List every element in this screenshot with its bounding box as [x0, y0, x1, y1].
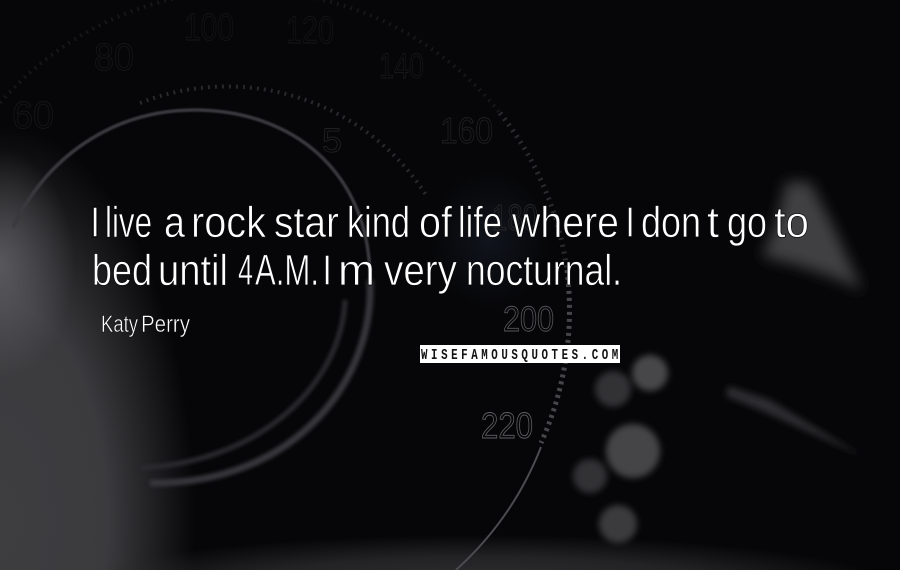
line 2: bed — [92, 246, 152, 295]
line 1: I — [624, 198, 636, 247]
outer tick arc, top — [0, 0, 500, 113]
speed labels: 200 — [503, 300, 554, 339]
line 2 — [92, 246, 622, 295]
speed labels: 100 — [184, 7, 234, 49]
author — [101, 311, 190, 338]
author: Katy — [101, 311, 138, 338]
inner gauge ring, bottom — [150, 280, 370, 483]
inner gauge ring, second band — [140, 300, 345, 468]
line 2: 4 — [238, 246, 253, 295]
left haze — [0, 120, 195, 570]
speed labels: 180 — [492, 197, 538, 238]
line 1: I — [89, 198, 101, 247]
watermark badge: WISEFAMOUSQUOTES.COM — [421, 346, 618, 364]
inner gauge ring, top — [13, 110, 370, 280]
line 1: t — [707, 198, 719, 247]
line 1: to — [774, 198, 809, 247]
line 1: star — [274, 198, 339, 247]
middle tick arc — [140, 86, 428, 198]
line 1: a — [164, 198, 185, 247]
speed labels: 220 — [481, 405, 533, 446]
speed labels: 120 — [286, 10, 334, 52]
blue tint behind gauge — [430, 170, 550, 310]
author: Perry — [141, 311, 190, 338]
line 2: nocturnal. — [466, 246, 622, 295]
line 1: of — [419, 198, 453, 247]
speed labels: 140 — [379, 47, 424, 86]
speed labels — [12, 7, 554, 446]
outer scale, lower right — [456, 270, 569, 570]
line 1: don — [641, 198, 701, 247]
line 2: A.M. — [255, 246, 319, 295]
outer tick arc, right — [500, 113, 567, 270]
line 1: kind — [347, 198, 410, 247]
speed labels: 60 — [12, 95, 54, 137]
quote text — [89, 198, 809, 295]
line 1: where — [511, 198, 619, 247]
line 2: I — [321, 246, 333, 295]
bottom haze — [60, 530, 900, 570]
line 1: go — [727, 198, 767, 247]
line 1: rock — [191, 198, 267, 247]
bokeh lights — [573, 355, 668, 543]
line 2: until — [158, 246, 228, 295]
line 1 — [89, 198, 809, 247]
blurred wedge, upper right — [762, 182, 862, 290]
line 2: very — [384, 246, 457, 295]
line 1: life — [458, 198, 502, 247]
speed labels: 160 — [440, 110, 493, 151]
left upper glow — [0, 150, 75, 380]
speed labels: 80 — [94, 37, 134, 79]
blurred needle — [726, 386, 862, 456]
speed labels: 5 — [322, 122, 342, 160]
line 1: live — [105, 198, 152, 247]
line 2: m — [338, 246, 375, 295]
